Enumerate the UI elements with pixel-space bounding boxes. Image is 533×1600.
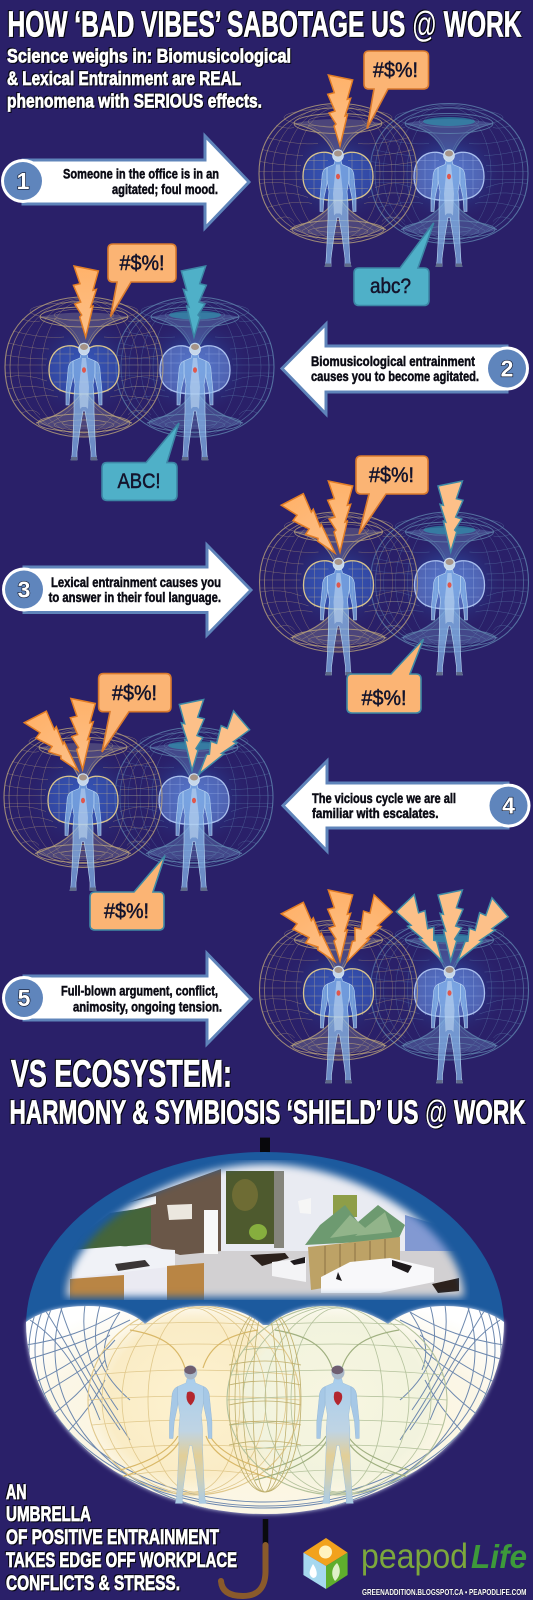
wordmark: peapod xyxy=(361,1537,468,1576)
umbrella ferrule xyxy=(260,1138,270,1154)
step 3 text xyxy=(49,574,221,605)
icon: light bolt with teal outline xyxy=(438,481,463,552)
number badge 1 xyxy=(1,159,45,203)
number badge 1: 1 xyxy=(17,168,30,194)
step 4 text: The vicious cycle we are all xyxy=(312,790,456,806)
number badge 2: 2 xyxy=(501,356,513,382)
logo: peapod life xyxy=(303,1537,527,1597)
icon: orange bolts xyxy=(281,481,353,561)
number badge 3 xyxy=(2,568,46,612)
panel: step 2 xyxy=(5,244,529,500)
speech bubble: swearing: #$%! xyxy=(112,682,157,705)
speech bubble: swearing reply xyxy=(90,856,165,930)
person: right figure xyxy=(317,1365,359,1503)
icon: cube xyxy=(303,1538,348,1589)
heading: vs ecosystem: VS ECOSYSTEM: xyxy=(11,1054,232,1096)
intro text: phenomena with SERIOUS effects. xyxy=(7,90,262,112)
icon: lightning bolt xyxy=(328,75,353,146)
icon: orange lightning bolt xyxy=(73,266,98,337)
speech bubble: swearing xyxy=(356,456,428,534)
intro text: & Lexical Entrainment are REAL xyxy=(7,68,241,90)
speech bubble: ABC: ABC! xyxy=(118,470,160,493)
icon: teal-outlined bolts xyxy=(179,700,253,782)
step 5 text: animosity, ongoing tension. xyxy=(73,999,222,1015)
number badge 3: 3 xyxy=(18,576,30,602)
number badge 4 xyxy=(486,784,530,828)
step 4 text: familiar with escalates. xyxy=(312,805,438,821)
intro text xyxy=(7,46,291,112)
speech bubble: abc xyxy=(354,223,434,306)
arrow: step 5 xyxy=(24,954,251,1044)
number badge 2 xyxy=(485,346,529,390)
closing text: OF POSITIVE ENTRAINMENT xyxy=(6,1526,219,1549)
logo: peapod life: Life xyxy=(471,1538,527,1575)
person: left figure xyxy=(169,1365,212,1503)
arrow: step 3 xyxy=(24,545,251,635)
illustration: umbrella xyxy=(20,1138,510,1596)
step 5 text: Full-blown argument, conflict, xyxy=(61,983,218,999)
closing text: UMBRELLA xyxy=(6,1503,91,1526)
step 3 text: to answer in their foul language. xyxy=(49,589,221,605)
panel: step 3 xyxy=(2,456,528,713)
icon: orange bolts xyxy=(281,890,395,969)
speech bubble: swearing xyxy=(108,244,176,317)
step 2 text: Biomusicological entrainment xyxy=(311,353,475,369)
number badge 4: 4 xyxy=(502,793,515,819)
speech bubble: swearing xyxy=(364,51,428,129)
closing text xyxy=(6,1481,237,1595)
speech bubble: swearing: #$%! xyxy=(373,59,418,82)
diagram: two toroidal fields xyxy=(5,297,274,460)
step 2 text xyxy=(311,353,479,384)
step 5 text xyxy=(61,983,222,1015)
umbrella canopy xyxy=(26,1152,504,1326)
diagram: two toroidal fields xyxy=(260,920,528,1084)
speech bubble: swearing reply xyxy=(347,639,424,713)
panel: step 4 xyxy=(4,674,530,930)
diagram: two toroidal fields xyxy=(4,728,273,891)
arrow: step 1 xyxy=(23,136,249,228)
intro text: Science weighs in: Biomusicological xyxy=(7,46,291,68)
closing text: TAKES EDGE OFF WORKPLACE xyxy=(6,1549,237,1572)
speech bubble: swearing reply: #$%! xyxy=(104,900,149,923)
shield grid: entrainment fields xyxy=(26,1306,504,1514)
step 4 text xyxy=(312,790,456,821)
step 1 text: agitated; foul mood. xyxy=(112,181,218,197)
step 1 text xyxy=(63,166,219,197)
number badge 5 xyxy=(2,976,46,1020)
icon: orange bolts xyxy=(24,698,95,778)
icon: teal lightning bolt xyxy=(181,266,206,337)
speech bubble: swearing: #$%! xyxy=(120,252,164,275)
arrow: step 2 xyxy=(282,324,507,414)
step 2 text: causes you to become agitated. xyxy=(311,368,479,384)
diagram: two toroidal fields xyxy=(259,104,528,267)
number badge 5: 5 xyxy=(18,985,31,1011)
panel: step 5 xyxy=(2,890,528,1084)
step 3 text: Lexical entrainment causes you xyxy=(51,574,221,590)
speech bubble: swearing reply: #$%! xyxy=(362,687,406,710)
step 1 text: Someone in the office is in an xyxy=(63,166,219,182)
icon: teal-outlined bolts xyxy=(394,890,511,969)
panel: step 1 xyxy=(1,51,528,306)
speech bubble: swearing: #$%! xyxy=(369,464,414,487)
office photo xyxy=(60,1160,470,1300)
speech bubble: abc: abc? xyxy=(370,275,411,298)
speech bubble: ABC xyxy=(102,423,179,500)
closing text: CONFLICTS & STRESS. xyxy=(6,1572,180,1595)
diagram: two toroidal fields xyxy=(260,512,528,676)
closing text: AN xyxy=(6,1481,26,1504)
arrow: step 4 xyxy=(283,761,508,851)
speech bubble: swearing xyxy=(99,674,171,752)
umbrella handle xyxy=(221,1519,266,1596)
